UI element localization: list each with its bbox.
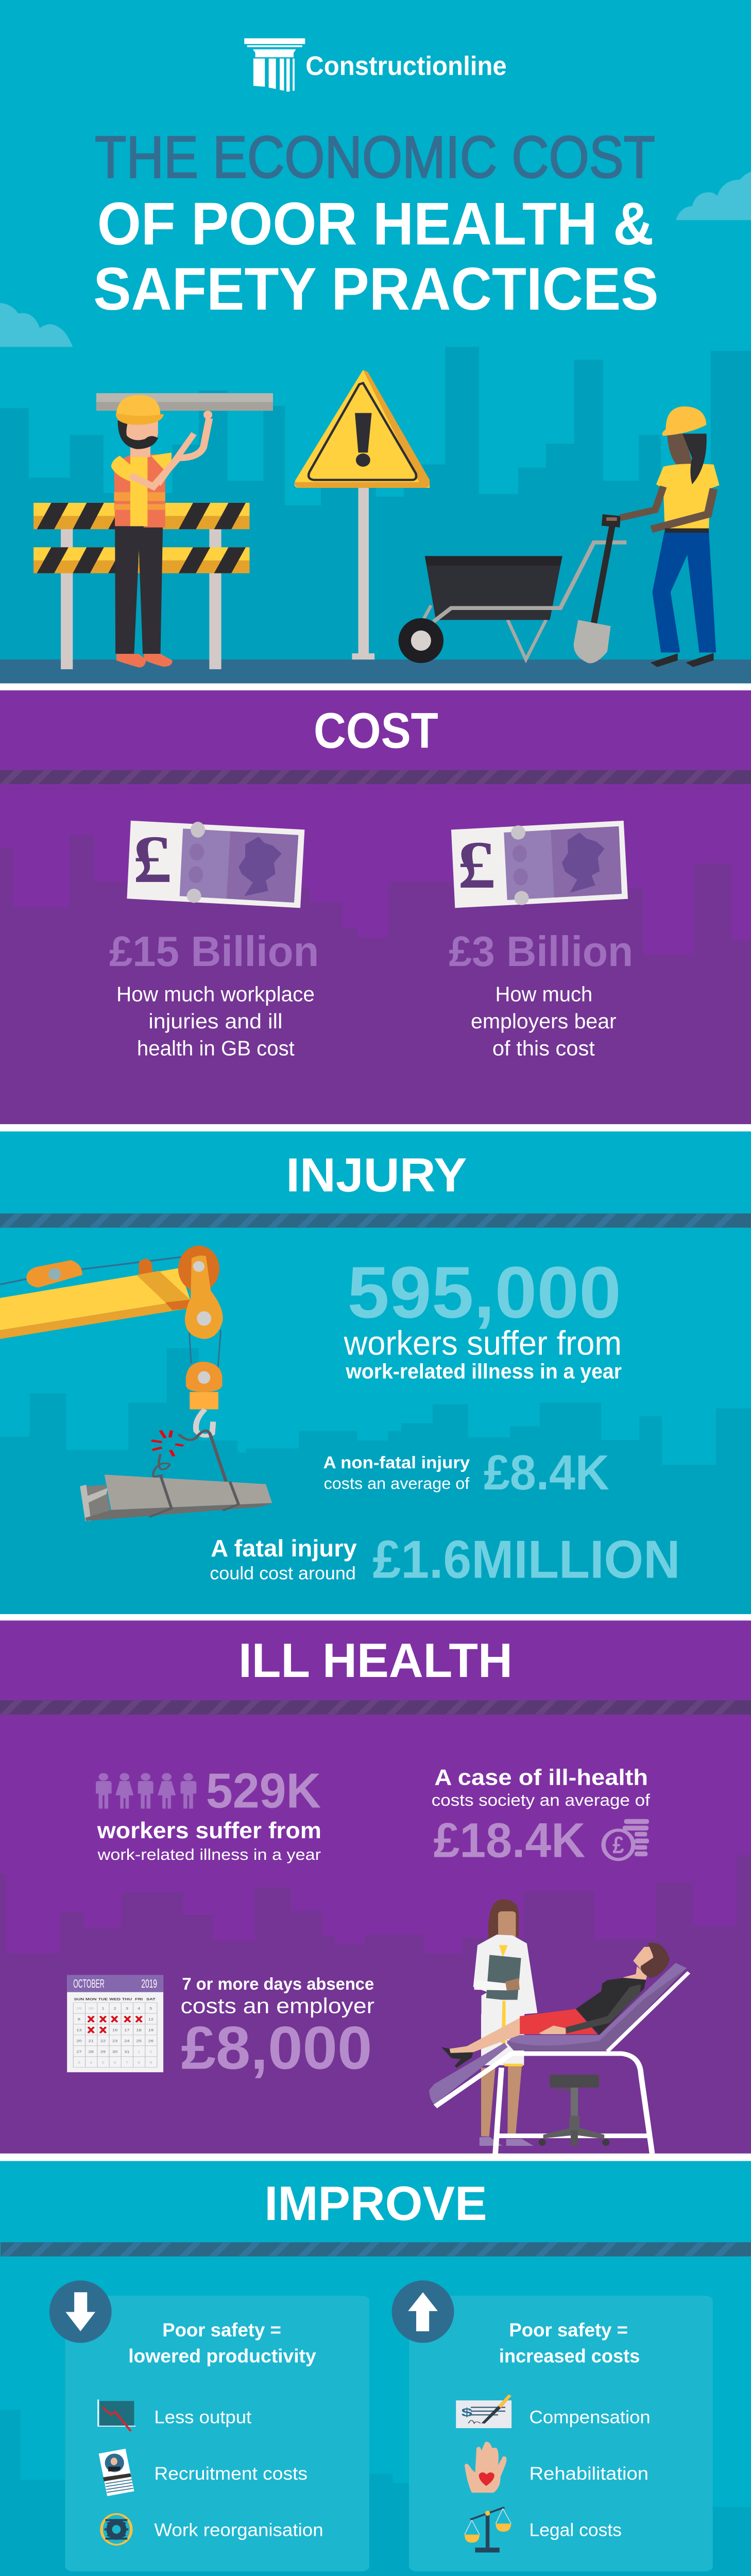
icon: calendar october 2019: 26 bbox=[148, 2039, 154, 2043]
icon: banknote 1 bbox=[127, 821, 304, 908]
icon: calendar october 2019: MON bbox=[86, 1997, 97, 2001]
icon: workers row bbox=[96, 1773, 196, 1808]
icon: down arrow bbox=[49, 2280, 112, 2343]
panel: improve bbox=[0, 2161, 751, 2576]
icon: calendar october 2019: 3 bbox=[78, 2060, 81, 2064]
icon: calendar october 2019: 9 bbox=[149, 2060, 152, 2064]
stat: non-fatal: A non-fatal injury bbox=[323, 1453, 470, 1472]
icon: calendar october 2019: 5 bbox=[101, 2060, 105, 2064]
skyline bbox=[0, 2410, 751, 2576]
icon: falling chart bbox=[98, 2399, 135, 2431]
icon: calendar october 2019: 16 bbox=[112, 2028, 118, 2032]
icon: calendar october 2019: 28 bbox=[89, 2050, 94, 2054]
icon: hand and heart bbox=[465, 2442, 506, 2493]
stat: fatal bbox=[210, 1530, 680, 1589]
stat: 15 billion: £15 Billion bbox=[109, 928, 319, 975]
stat: non-fatal: costs an average of bbox=[324, 1474, 470, 1493]
stat: 3 billion bbox=[449, 928, 633, 1060]
icon: calendar october 2019: 2019 bbox=[141, 1977, 157, 1990]
icon: coins bbox=[604, 1819, 649, 1859]
icon: scales bbox=[465, 2507, 511, 2552]
skyline bbox=[0, 1855, 751, 2154]
panel: increased costs bbox=[392, 2280, 713, 2571]
stat: non-fatal: £8.4K bbox=[484, 1445, 609, 1500]
title bbox=[93, 124, 659, 323]
stat: fatal: could cost around bbox=[210, 1563, 356, 1583]
title: SAFETY PRACTICES bbox=[93, 255, 659, 323]
icon: cheque and pen bbox=[456, 2394, 511, 2428]
icon: calendar october 2019: WED bbox=[109, 1997, 121, 2001]
hazard stripe bbox=[0, 770, 751, 784]
heading: poor safety: Poor safety = bbox=[162, 2319, 281, 2341]
icon: cheque and pen: $ bbox=[461, 2405, 472, 2419]
worker woman bbox=[620, 406, 720, 667]
icon: calendar october 2019: 7 bbox=[126, 2060, 129, 2064]
icon: calendar october 2019: 1 bbox=[138, 2050, 141, 2054]
stat: absence: £8,000 bbox=[181, 2014, 372, 2081]
stat: 595,000: 595,000 bbox=[347, 1251, 621, 1333]
icon: calendar october 2019: 13 bbox=[76, 2028, 82, 2032]
panel: cost bbox=[0, 690, 751, 1124]
stat: 3 billion: How much bbox=[495, 982, 592, 1006]
icon: calendar october 2019: FRI bbox=[135, 1997, 143, 2001]
label: less output: Less output bbox=[154, 2408, 251, 2428]
icon: calendar october 2019: 27 bbox=[76, 2050, 82, 2054]
stat: 15 billion: health in GB cost bbox=[137, 1037, 295, 1060]
icon: calendar october 2019: 5 bbox=[149, 2007, 152, 2010]
stat: 3 billion: employers bear bbox=[471, 1009, 617, 1033]
icon: calendar october 2019: THU bbox=[122, 1997, 132, 2001]
icon: calendar october 2019: 30 bbox=[89, 2007, 94, 2010]
icon: calendar october 2019: 6 bbox=[114, 2060, 116, 2064]
icon: calendar october 2019: 17 bbox=[124, 2028, 130, 2032]
stat: 529K: work-related illness in a year bbox=[97, 1845, 321, 1863]
ground bbox=[0, 659, 751, 683]
hazard stripe bbox=[1, 2242, 751, 2257]
icon: calendar october 2019: 8 bbox=[138, 2060, 141, 2064]
city skyline bbox=[0, 347, 751, 660]
icon: calendar october 2019: 3 bbox=[126, 2007, 129, 2010]
icon: calendar october 2019: 29 bbox=[100, 2050, 106, 2054]
label: recruitment costs: Recruitment costs bbox=[154, 2464, 308, 2484]
stat: case of ill-health: A case of ill-health bbox=[434, 1765, 648, 1790]
heading: poor safety: increased costs bbox=[499, 2345, 640, 2367]
logo bbox=[244, 38, 507, 92]
cloud right bbox=[676, 172, 751, 220]
stat: 15 billion bbox=[109, 928, 319, 1060]
heading: poor safety bbox=[499, 2319, 640, 2367]
heading: INJURY bbox=[286, 1148, 467, 1202]
icon: CV bbox=[99, 2449, 134, 2496]
label: work reorganisation: Work reorganisation bbox=[154, 2520, 323, 2540]
icon: calendar october 2019: 12 bbox=[148, 2018, 154, 2021]
icon: calendar october 2019: 23 bbox=[112, 2039, 118, 2043]
skyline bbox=[0, 1348, 751, 1614]
icon: calendar october 2019: 4 bbox=[90, 2060, 93, 2064]
beam bbox=[96, 393, 273, 411]
icon: calendar october 2019: 2 bbox=[114, 2007, 116, 2010]
icon: calendar october 2019: 24 bbox=[124, 2039, 130, 2043]
icon: calendar october 2019: 2 bbox=[149, 2050, 152, 2054]
stat: 3 billion: of this cost bbox=[492, 1037, 595, 1060]
icon: calendar october 2019: 20 bbox=[76, 2039, 82, 2043]
panel: hero header bbox=[0, 0, 751, 683]
icon: calendar october 2019: 21 bbox=[89, 2039, 94, 2043]
stat: 529K: workers suffer from bbox=[97, 1818, 321, 1843]
icon: crane bbox=[0, 1246, 223, 1436]
label: rehabilitation: Rehabilitation bbox=[529, 2464, 648, 2484]
title: OF POOR HEALTH & bbox=[97, 190, 654, 257]
logo: Constructionline bbox=[305, 50, 507, 81]
icon: calendar october 2019: 6 bbox=[78, 2018, 81, 2021]
icon: calendar october 2019: SUN bbox=[74, 1997, 84, 2001]
skyline bbox=[0, 835, 751, 1124]
stat: fatal: A fatal injury bbox=[211, 1535, 357, 1562]
stat: absence bbox=[181, 1974, 374, 2081]
icon: banknote 1: £ bbox=[133, 822, 172, 897]
icon: up arrow bbox=[392, 2280, 454, 2343]
icon: gear bbox=[101, 2514, 131, 2545]
cloud left bbox=[0, 303, 73, 347]
barrier bbox=[33, 503, 249, 669]
icon: calendar october 2019: 22 bbox=[100, 2039, 106, 2043]
shovel bbox=[574, 514, 621, 663]
hazard stripe bbox=[0, 1213, 751, 1228]
icon: calendar october 2019: 1 bbox=[101, 2007, 105, 2010]
stat: case of ill-health bbox=[432, 1765, 650, 1868]
icon: calendar october 2019: TUE bbox=[98, 1997, 108, 2001]
wheelbarrow bbox=[399, 543, 626, 663]
heading: ILL HEALTH bbox=[238, 1633, 513, 1687]
stat: 529K bbox=[97, 1764, 321, 1863]
stat: 529K: 529K bbox=[206, 1764, 321, 1818]
stat: 15 billion: How much workplace bbox=[116, 982, 315, 1006]
heading: poor safety bbox=[128, 2319, 316, 2367]
icon: calendar october 2019: SAT bbox=[146, 1997, 156, 2001]
icon: calendar october 2019: OCTOBER bbox=[73, 1977, 105, 1990]
panel: injury bbox=[0, 1131, 751, 1614]
heading: poor safety: lowered productivity bbox=[128, 2345, 316, 2367]
icon: coins: £ bbox=[612, 1832, 624, 1858]
icon: banknote 2: £ bbox=[457, 827, 496, 903]
label: legal costs: Legal costs bbox=[529, 2520, 622, 2540]
stat: case of ill-health: £18.4K bbox=[434, 1814, 585, 1868]
label: compensation: Compensation bbox=[529, 2408, 651, 2428]
worker man bbox=[111, 395, 212, 668]
illustration: exam chair and patient bbox=[429, 1963, 689, 2154]
panel: ill health bbox=[0, 1620, 751, 2154]
heading: poor safety: Poor safety = bbox=[509, 2319, 628, 2341]
icon: banknote 2 bbox=[451, 821, 628, 908]
icon: snapped wire and girder bbox=[80, 1431, 272, 1521]
stat: absence: 7 or more days absence bbox=[182, 1974, 374, 1993]
icon: calendar october 2019: 25 bbox=[136, 2039, 142, 2043]
illustration: patient head bbox=[633, 1943, 670, 1978]
panel: lowered productivity bbox=[49, 2280, 369, 2571]
icon: calendar october 2019 bbox=[67, 1975, 163, 2072]
stat: 15 billion: injuries and ill bbox=[148, 1009, 283, 1033]
icon: calendar october 2019: 4 bbox=[138, 2007, 141, 2010]
warning sign bbox=[295, 370, 430, 659]
icon: calendar october 2019: 19 bbox=[148, 2028, 154, 2032]
stat: case of ill-health: costs society an average of bbox=[432, 1791, 650, 1810]
hazard stripe bbox=[0, 1700, 751, 1715]
stat: absence: costs an employer bbox=[181, 1993, 374, 2018]
icon: calendar october 2019: 30 bbox=[112, 2050, 118, 2054]
icon: calendar october 2019: 29 bbox=[76, 2007, 82, 2010]
stat: non-fatal bbox=[323, 1445, 609, 1500]
heading: COST bbox=[314, 702, 438, 758]
icon: calendar october 2019: 31 bbox=[124, 2050, 130, 2054]
illustration: doctor upper bbox=[473, 1899, 537, 2065]
stat: 595,000 bbox=[344, 1251, 622, 1383]
icon: calendar october 2019: 18 bbox=[136, 2028, 142, 2032]
heading: IMPROVE bbox=[264, 2177, 487, 2230]
